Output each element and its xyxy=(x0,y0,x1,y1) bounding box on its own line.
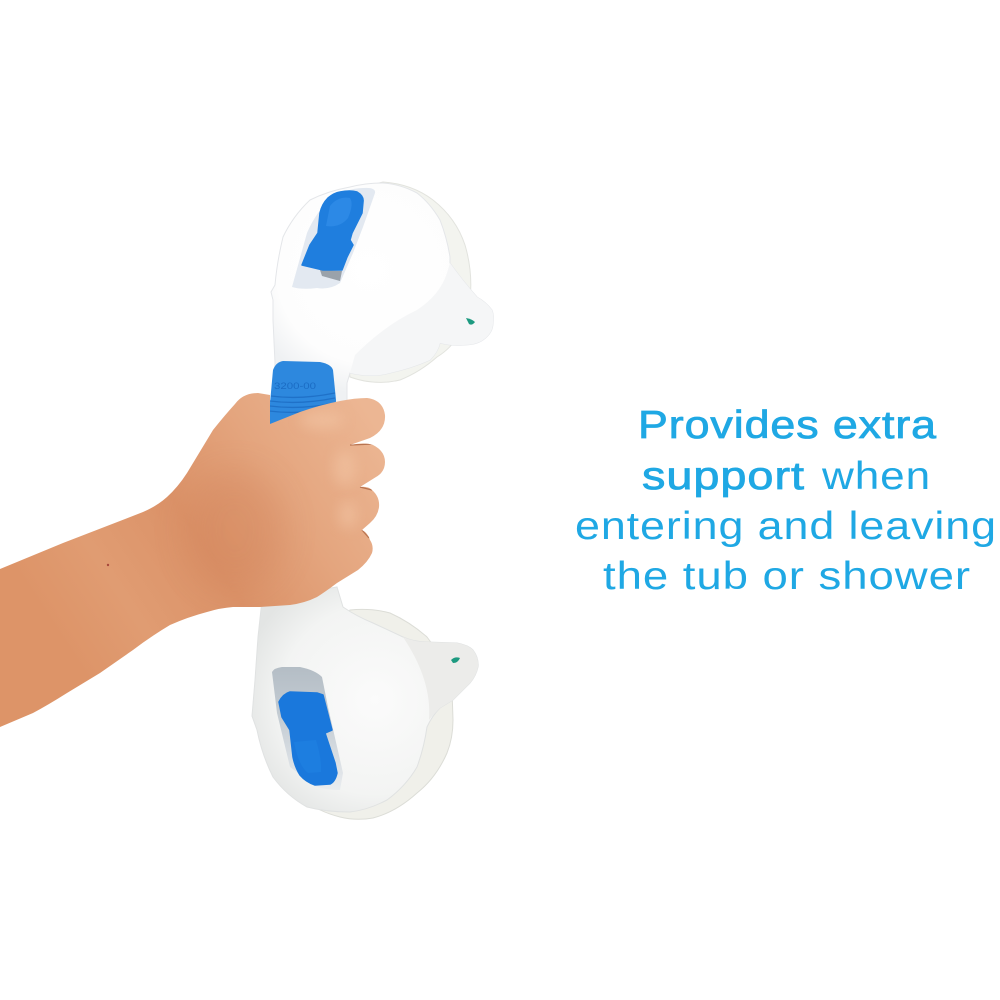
bottom suction cup disc xyxy=(300,609,453,819)
caption line 2 regular part: when xyxy=(821,455,931,498)
top locking tab shading xyxy=(350,263,493,376)
blue grip with ridges xyxy=(268,361,336,425)
caption line 1: Provides extra xyxy=(638,404,937,447)
top suction cup disc xyxy=(340,182,471,382)
caption line 2 bold part: support xyxy=(642,455,805,498)
caption line 3: entering and leaving xyxy=(575,505,997,548)
grip part number: 3200-00 xyxy=(274,381,316,391)
hand and forearm xyxy=(0,393,385,727)
bottom tab xyxy=(403,637,478,720)
bottom blue latch xyxy=(279,692,337,785)
caption line 4: the tub or shower xyxy=(603,555,971,598)
illustration: hand gripping suction grab bar xyxy=(0,182,494,820)
top blue latch xyxy=(302,191,363,281)
bottom latch slot xyxy=(272,667,343,790)
top grab bar body xyxy=(271,183,493,420)
top latch slot xyxy=(292,188,375,289)
bottom grab bar body xyxy=(252,587,478,812)
top tab green indicator xyxy=(466,318,475,325)
hand shading xyxy=(106,412,373,566)
bottom tab green indicator xyxy=(451,657,460,663)
